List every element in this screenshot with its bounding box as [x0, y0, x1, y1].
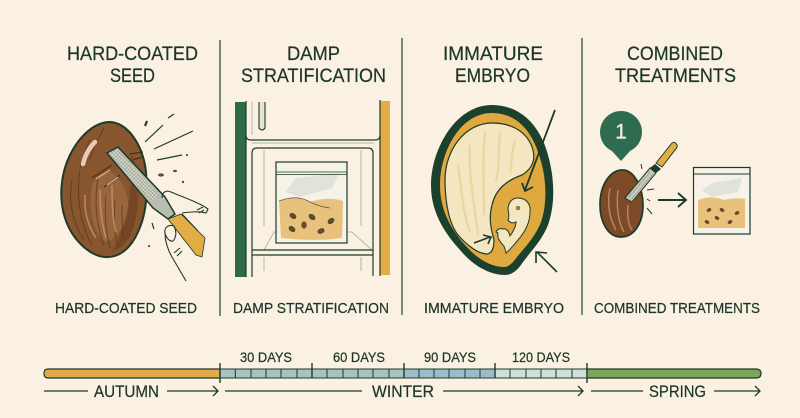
icon: fridge with seed bag: [235, 100, 390, 277]
heading: combined treatments: TREATMENTS: [615, 65, 736, 87]
arrow: file to bag: [658, 193, 686, 207]
icon: small seed with file: [600, 142, 677, 237]
label: combined treatments: COMBINED TREATMENTS: [594, 300, 760, 317]
panel: immature embryo: [424, 43, 564, 317]
icon: seed cross-section: [431, 105, 557, 275]
panel: hard-coated seed: [55, 43, 208, 317]
label: damp stratification: DAMP STRATIFICATION: [233, 300, 389, 317]
day labels: 30 DAYS: [240, 350, 292, 365]
season: autumn: AUTUMN: [94, 382, 159, 401]
season: spring: [591, 382, 760, 401]
day labels: 90 DAYS: [424, 350, 476, 365]
heading: hard-coated seed: [67, 43, 198, 87]
heading: combined treatments: [615, 43, 736, 87]
bar: winter segment: [220, 363, 587, 383]
heading: damp stratification: STRATIFICATION: [241, 65, 386, 87]
season: autumn: [44, 382, 218, 401]
label: immature embryo: IMMATURE EMBRYO: [424, 300, 564, 317]
bar: autumn segment: [44, 369, 220, 378]
label: hard-coated seed: HARD-COATED SEED: [55, 300, 197, 317]
heading: hard-coated seed: HARD-COATED: [67, 43, 198, 65]
day labels: [240, 350, 570, 365]
day labels: 60 DAYS: [333, 350, 385, 365]
season: winter: WINTER: [372, 382, 434, 401]
heading: immature embryo: [443, 43, 543, 87]
heading: immature embryo: IMMATURE: [443, 43, 543, 65]
icon: numbered pin: 1: [615, 120, 627, 144]
season: winter: [225, 382, 583, 401]
panel: damp stratification: [233, 43, 390, 317]
timeline: [44, 350, 761, 401]
heading: immature embryo: EMBRYO: [455, 65, 530, 87]
icon: numbered pin: [600, 111, 642, 161]
heading: damp stratification: DAMP: [287, 43, 340, 65]
heading: hard-coated seed: SEED: [110, 65, 155, 87]
icon: seed being filed: [61, 114, 208, 281]
heading: damp stratification: [241, 43, 386, 87]
panel: combined treatments: [594, 43, 760, 317]
season: spring: SPRING: [649, 382, 706, 401]
bar: spring segment: [587, 369, 761, 378]
heading: combined treatments: COMBINED: [627, 43, 723, 65]
icon: small seed bag: [693, 168, 750, 234]
day labels: 120 DAYS: [512, 350, 570, 365]
